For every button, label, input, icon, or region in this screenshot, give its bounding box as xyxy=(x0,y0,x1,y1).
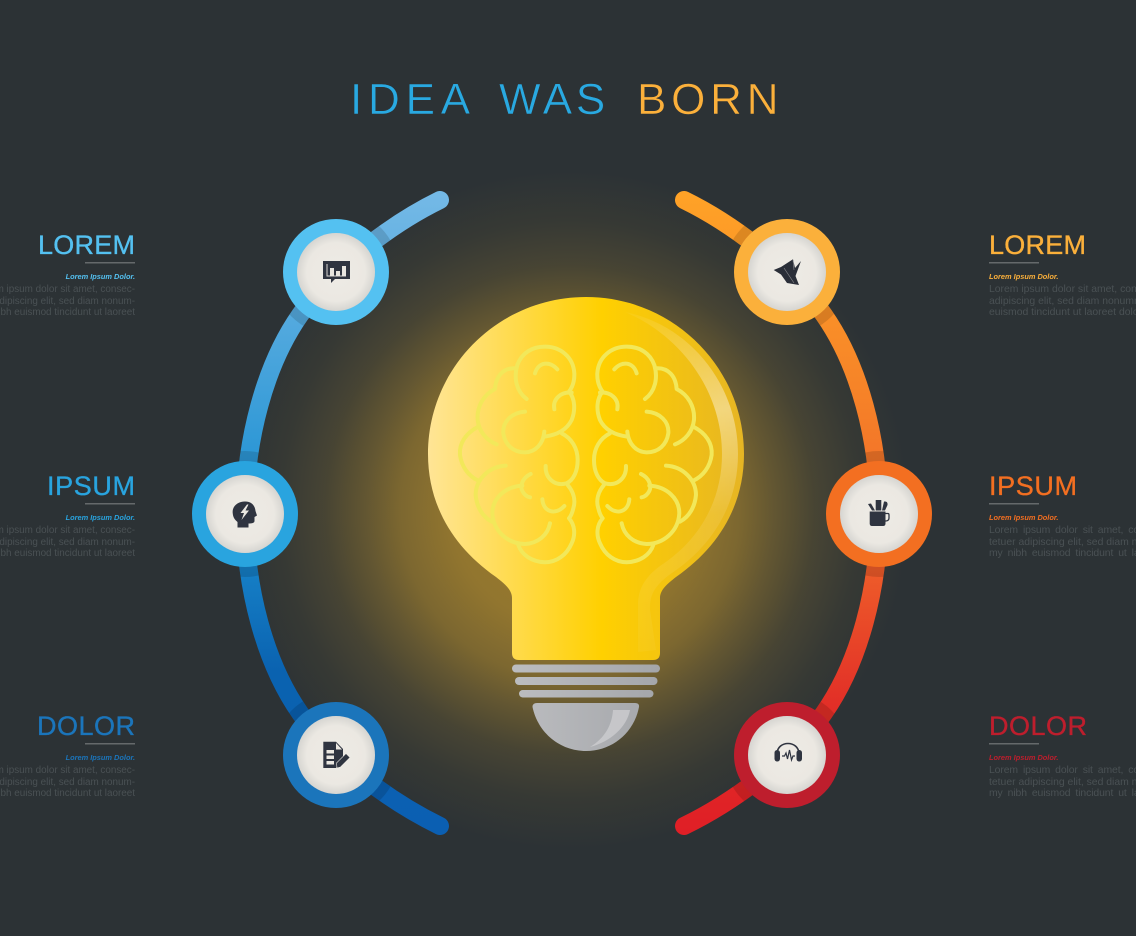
text block: right dolor xyxy=(989,711,1136,799)
icon: headphones xyxy=(774,744,802,762)
text block: left dolor xyxy=(0,711,135,799)
text block: right lorem: Lorem Ipsum Dolor. xyxy=(989,272,1058,281)
text block: right dolor: Lorem Ipsum Dolor. xyxy=(989,753,1058,762)
brain outline xyxy=(460,347,712,562)
marker: origami, amber xyxy=(734,219,840,325)
text block: left ipsum xyxy=(0,471,135,559)
text block: right ipsum: Lorem Ipsum Dolor. xyxy=(989,513,1058,522)
text block: left lorem: Lorem Ipsum Dolor. xyxy=(66,272,135,281)
icon: head with bolt xyxy=(233,502,257,528)
icon: origami bird xyxy=(774,259,801,285)
light bulb xyxy=(428,297,744,751)
arc: left blue xyxy=(245,200,440,826)
text block: right lorem xyxy=(989,230,1136,318)
arc: right orange xyxy=(684,200,879,826)
bulb base dome xyxy=(532,703,639,751)
glass highlight xyxy=(625,312,738,652)
title: BORN xyxy=(637,75,783,124)
icon: document with pencil xyxy=(323,742,350,768)
marker: head, cyan xyxy=(192,461,298,567)
text block: left ipsum: IPSUM xyxy=(47,471,135,501)
text block: right dolor: DOLOR xyxy=(989,711,1087,741)
title: IDEA xyxy=(350,75,476,124)
text block: left lorem xyxy=(0,230,135,318)
marker: headphones, red xyxy=(734,702,840,808)
text block: left ipsum: Lorem Ipsum Dolor. xyxy=(66,513,135,522)
bulb glass xyxy=(428,297,744,660)
icon: chart bubble xyxy=(323,261,350,283)
text block: left dolor: DOLOR xyxy=(37,711,135,741)
screw thread bars xyxy=(512,664,660,698)
marker: document, dark blue xyxy=(283,702,389,808)
title: WAS xyxy=(499,75,609,124)
marker: chart, blue xyxy=(283,219,389,325)
bulb glow xyxy=(230,170,910,850)
text block: right ipsum xyxy=(989,471,1136,559)
text block: right ipsum: IPSUM xyxy=(989,471,1077,501)
dome highlight xyxy=(590,710,630,747)
text block: left dolor: Lorem Ipsum Dolor. xyxy=(66,753,135,762)
marker: mug, orange xyxy=(826,461,932,567)
icon: mug with pens xyxy=(868,500,889,526)
text block: left lorem: LOREM xyxy=(38,230,135,260)
text block: right lorem: LOREM xyxy=(989,230,1086,260)
